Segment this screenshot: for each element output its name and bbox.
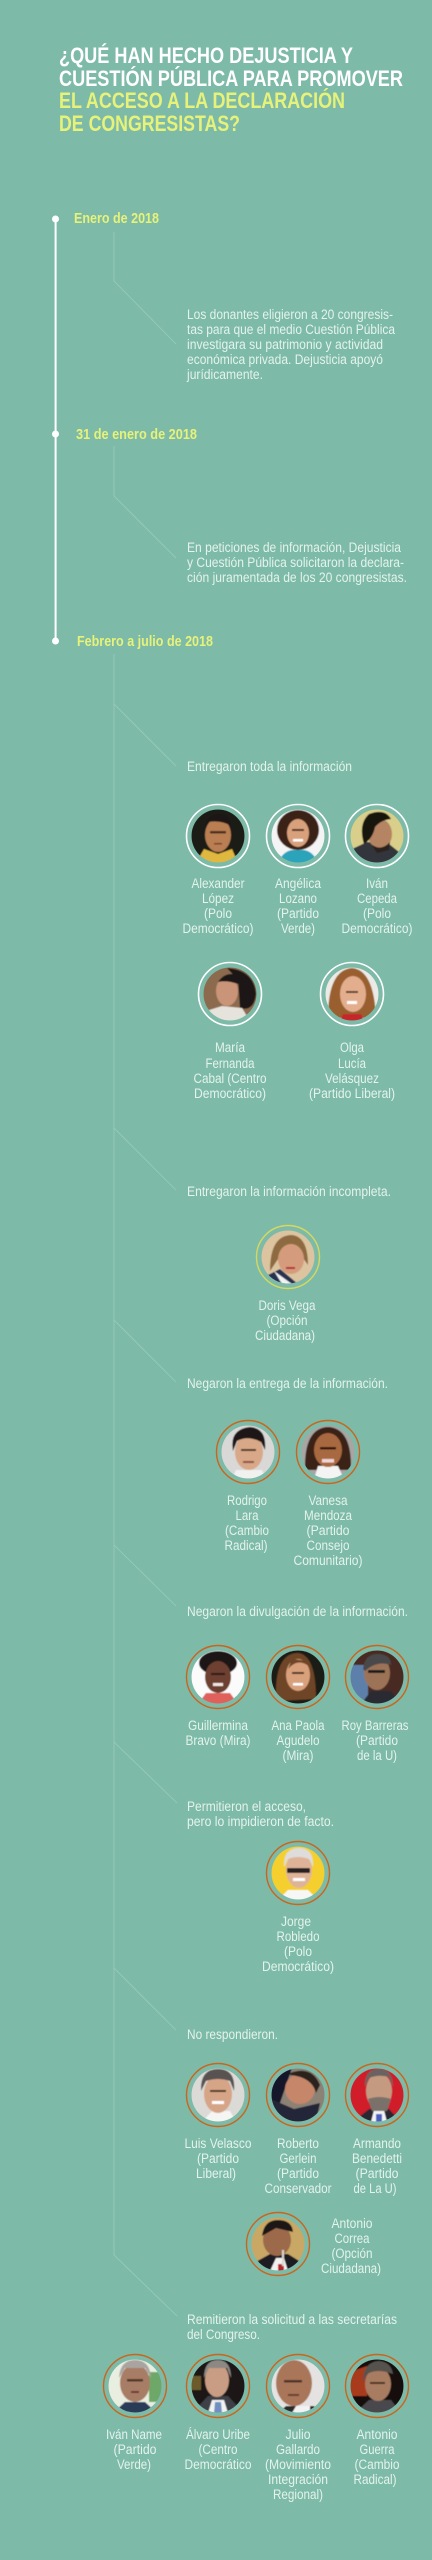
person: Armando Benedetti: de La U): [354, 2181, 396, 2196]
person: Armando Benedetti: [346, 2064, 408, 2196]
person: Vanesa Mendoza: Mendoza: [304, 1508, 352, 1523]
person: Ana Paola Agudelo: Agudelo: [276, 1733, 320, 1748]
person: Iván Name: Verde): [117, 2457, 151, 2472]
person: Vanesa Mendoza: Consejo: [306, 1538, 350, 1553]
person: Rodrigo Lara: Lara: [236, 1508, 259, 1523]
person: Vanesa Mendoza: Vanesa: [308, 1493, 348, 1508]
person: Antonio Guerra: Guerra: [360, 2442, 395, 2457]
heading: Entregaron toda la información: Entregaron toda la información: [187, 759, 352, 774]
person: María Fernanda Cabal: Democrático): [194, 1086, 266, 1101]
person: Álvaro Uribe: (Centro: [198, 2442, 238, 2457]
person: María Fernanda Cabal: Fernanda: [206, 1056, 255, 1071]
person: Iván Cepeda: [342, 804, 412, 936]
person: María Fernanda Cabal: [194, 962, 266, 1101]
person: Vanesa Mendoza: (Partido: [306, 1523, 350, 1538]
person: Alexander López: Democrático): [182, 921, 254, 936]
heading: Permitieron el acceso: pero lo impidieron de facto.: [187, 1814, 334, 1829]
person: Iván Cepeda: Cepeda: [357, 891, 397, 906]
person: Iván Name: Iván Name: [106, 2427, 162, 2442]
person: Guillermina Bravo: Bravo (Mira): [186, 1733, 250, 1748]
title: ¿QUÉ HAN HECHO DEJUSTICIA Y: [59, 43, 353, 68]
date: 31 de enero de 2018: 31 de enero de 2018: [76, 427, 197, 443]
person: María Fernanda Cabal: María: [215, 1040, 245, 1055]
heading: Permitieron el acceso: [187, 1799, 334, 1829]
person: Doris Vega: (Opción: [266, 1313, 308, 1328]
person: Roberto Gerlein: [264, 2064, 332, 2196]
connector lines: [114, 232, 177, 2316]
person: Rodrigo Lara: Radical): [224, 1538, 268, 1553]
text: peticiones: y Cuestión Pública solicitaron la declara-: [187, 555, 404, 570]
date: Enero de 2018: Enero de 2018: [74, 211, 159, 227]
person: Alexander López: [182, 804, 254, 936]
person: Antonio Guerra: Antonio: [356, 2427, 398, 2442]
text: donantes: [186, 307, 395, 382]
heading: Negaron la entrega: Negaron la entrega de la información.: [187, 1376, 388, 1391]
heading: Remitieron la solicitud: del Congreso.: [187, 2327, 260, 2342]
heading: No respondieron: No respondieron.: [187, 2027, 278, 2042]
person: Rodrigo Lara: (Cambio: [225, 1523, 269, 1538]
person: Julio Gallardo: (Movimiento: [265, 2457, 331, 2472]
person: Roy Barreras: Roy Barreras: [342, 1718, 409, 1733]
person: Luis Velasco: Luis Velasco: [184, 2136, 252, 2151]
person: Iván Cepeda: Iván: [366, 876, 388, 891]
person: Julio Gallardo: Regional): [273, 2487, 323, 2502]
title: [59, 43, 403, 136]
person: Olga Lucía Velásquez: Olga: [340, 1040, 364, 1055]
person: Armando Benedetti: (Partido: [356, 2166, 398, 2181]
person: Jorge Robledo: (Polo: [284, 1944, 312, 1959]
person: Armando Benedetti: Armando: [353, 2136, 401, 2151]
person: Antonio Correa: [246, 2212, 381, 2276]
person: Alexander López: López: [202, 891, 234, 906]
person: Angélica Lozano: (Partido: [277, 906, 319, 921]
person: Angélica Lozano: Verde): [281, 921, 315, 936]
person: Olga Lucía Velásquez: Lucía: [338, 1056, 366, 1071]
person: María Fernanda Cabal: Cabal (Centro: [194, 1071, 266, 1086]
person: Angélica Lozano: [266, 804, 330, 936]
heading: Remitieron la solicitud: [187, 2312, 397, 2342]
person: Roberto Gerlein: Conservador: [264, 2181, 332, 2196]
person: Roberto Gerlein: Roberto: [277, 2136, 319, 2151]
person: Jorge Robledo: Jorge: [281, 1914, 311, 1929]
person: Iván Name: [104, 2354, 166, 2472]
person: Ana Paola Agudelo: (Mira): [282, 1748, 314, 1763]
person: Álvaro Uribe: Álvaro Uribe: [186, 2427, 250, 2442]
person: Alexander López: (Polo: [204, 906, 232, 921]
person: Doris Vega: [255, 1226, 320, 1343]
text: peticiones: ción juramentada de los 20 congresistas.: [187, 570, 407, 585]
heading: Remitieron la solicitud: Remitieron la solicitud a las secretarías: [187, 2312, 397, 2327]
person: Doris Vega: Doris Vega: [258, 1298, 316, 1313]
person: Doris Vega: Ciudadana): [255, 1328, 315, 1343]
text: donantes: jurídicamente.: [186, 367, 263, 382]
person: Álvaro Uribe: [184, 2354, 252, 2472]
person: Antonio Correa: Antonio: [332, 2216, 372, 2231]
heading: Entregaron la información incompleta: Entregaron la información incompleta.: [187, 1184, 391, 1199]
heading: Permitieron el acceso: Permitieron el acceso,: [187, 1799, 306, 1814]
person: Guillermina Bravo: [186, 1646, 250, 1748]
person: Antonio Guerra: Radical): [354, 2472, 396, 2487]
heading: Negaron la divulgación: Negaron la divulgación de la información.: [187, 1604, 408, 1619]
person: Angélica Lozano: Lozano: [279, 891, 317, 906]
person: Álvaro Uribe: Democrático: [184, 2457, 252, 2472]
person: Ana Paola Agudelo: Ana Paola: [272, 1718, 325, 1733]
person: Jorge Robledo: Robledo: [276, 1929, 320, 1944]
timeline: main line with dots: [52, 216, 59, 644]
text: donantes: Los donantes eligieron a 20 congresis-: [187, 307, 393, 322]
title: EL ACCESO A LA DECLARACIÓN: [59, 88, 345, 113]
person: Vanesa Mendoza: Comunitario): [294, 1553, 362, 1568]
person: Antonio Guerra: [346, 2354, 408, 2487]
person: Julio Gallardo: Julio: [286, 2427, 310, 2442]
person: Antonio Correa: Correa: [334, 2231, 370, 2246]
person: Olga Lucía Velásquez: (Partido Liberal): [309, 1086, 395, 1101]
person: Antonio Guerra: (Cambio: [354, 2457, 400, 2472]
person: Iván Cepeda: Democrático): [342, 921, 412, 936]
person: Luis Velasco: Liberal): [196, 2166, 236, 2181]
person: Julio Gallardo: [265, 2354, 331, 2502]
person: Roy Barreras: (Partido: [356, 1733, 398, 1748]
person: Julio Gallardo: Gallardo: [276, 2442, 320, 2457]
person: Roy Barreras: de la U): [357, 1748, 397, 1763]
person: Antonio Correa: Ciudadana): [321, 2261, 381, 2276]
person: Angélica Lozano: Angélica: [275, 876, 321, 891]
text: peticiones: [187, 540, 407, 585]
person: Iván Cepeda: (Polo: [363, 906, 391, 921]
person: Julio Gallardo: Integración: [268, 2472, 328, 2487]
person: Luis Velasco: (Partido: [197, 2151, 239, 2166]
title: DE CONGRESISTAS?: [59, 111, 240, 136]
person: Vanesa Mendoza: [294, 1420, 362, 1568]
date: Febrero a julio de 2018: Febrero a julio de 2018: [77, 634, 213, 650]
person: Olga Lucía Velásquez: Velásquez: [325, 1071, 379, 1086]
person: Luis Velasco: [184, 2064, 252, 2181]
text: donantes: económica privada. Dejusticia apoyó: [187, 352, 383, 367]
text: peticiones: En peticiones de información, Dejusticia: [187, 540, 401, 555]
person: Jorge Robledo: [262, 1842, 334, 1974]
text: donantes: investigara su patrimonio y actividad: [187, 337, 383, 352]
person: Iván Name: (Partido: [114, 2442, 156, 2457]
person: Guillermina Bravo: Guillermina: [188, 1718, 248, 1733]
person: Jorge Robledo: Democrático): [262, 1959, 334, 1974]
person: Roy Barreras: [342, 1646, 409, 1763]
person: Alexander López: Alexander: [192, 876, 245, 891]
person: Roberto Gerlein: Gerlein: [280, 2151, 316, 2166]
person: Roberto Gerlein: (Partido: [277, 2166, 319, 2181]
person: Antonio Correa: (Opción: [332, 2246, 372, 2261]
person: Ana Paola Agudelo: [266, 1646, 330, 1763]
person: Olga Lucía Velásquez: [309, 962, 395, 1101]
person: Rodrigo Lara: [216, 1420, 280, 1553]
person: Rodrigo Lara: Rodrigo: [227, 1493, 267, 1508]
person: Armando Benedetti: Benedetti: [352, 2151, 402, 2166]
text: donantes: tas para que el medio Cuestión Pública: [187, 322, 395, 337]
